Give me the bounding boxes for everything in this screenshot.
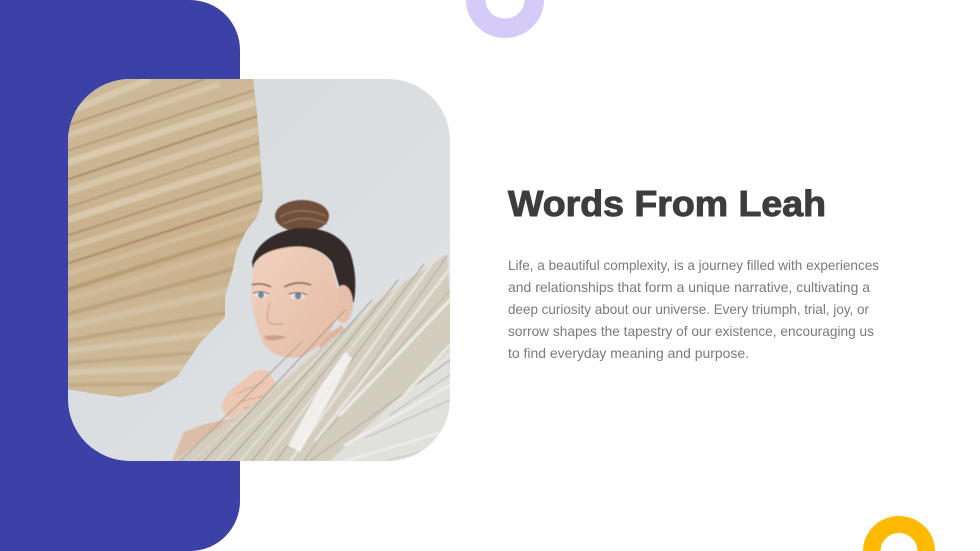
body paragraph: and relationships that form a unique narrative, cultivating a (508, 279, 870, 295)
hand holding palm (221, 370, 282, 420)
hair (252, 228, 355, 306)
white shirt gap (288, 352, 352, 452)
face (251, 247, 338, 358)
ear and neck (319, 324, 344, 349)
hair bun (275, 200, 329, 232)
body paragraph: sorrow shapes the tapestry of our existence, encouraging us (508, 323, 874, 339)
blurred dry palm leaf foreground (60, 79, 270, 404)
nose (267, 302, 283, 325)
lavender ring decoration (466, 0, 544, 38)
blue background panel (0, 0, 240, 551)
bun strands (280, 211, 327, 224)
title: Words From Leah (508, 183, 826, 224)
eyes (254, 292, 268, 298)
palm frond foreground (172, 254, 450, 461)
lips (264, 335, 287, 341)
yellow ring decoration (863, 516, 935, 551)
photo wall background (68, 79, 450, 461)
woman's head (251, 200, 355, 368)
photo: woman with dried palm leaves (60, 79, 450, 461)
lower right frond (310, 345, 450, 461)
body paragraph (508, 257, 879, 361)
woman's shoulder and shirt (172, 418, 250, 461)
body paragraph: to find everyday meaning and purpose. (508, 345, 749, 361)
body paragraph: Life, a beautiful complexity, is a journey filled with experiences (508, 257, 879, 273)
eyebrows (252, 283, 311, 287)
body paragraph: deep curiosity about our universe. Every triumph, trial, joy, or (508, 301, 869, 317)
